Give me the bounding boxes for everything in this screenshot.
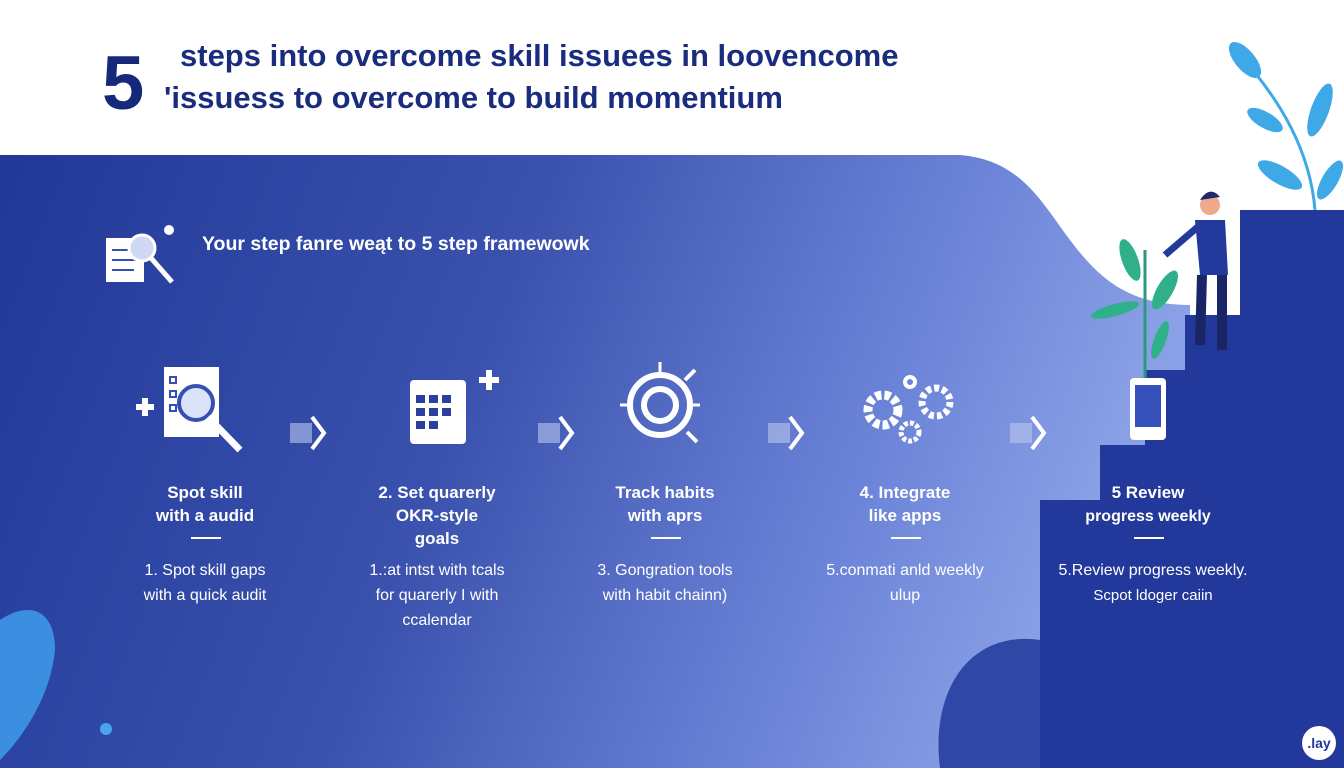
subtitle with icon [106, 225, 590, 284]
step 2: 2. Set quarerly [378, 483, 496, 502]
arrow 1 [290, 416, 326, 450]
step 2: OKR-style [396, 506, 478, 525]
icon: document magnifier [106, 225, 174, 284]
arrow 4 [1010, 416, 1046, 450]
plant with phone [1090, 239, 1178, 440]
step 3: Track habits [615, 483, 715, 502]
step 5: 5.Review progress weekly. [1058, 562, 1248, 579]
icon: target [620, 362, 700, 444]
step 2 [369, 370, 505, 629]
step 1 [136, 367, 266, 604]
title text [164, 38, 898, 115]
arrow 3 [768, 416, 804, 450]
step 4: ulup [890, 587, 920, 604]
step 4 [826, 375, 984, 604]
step 3: 3. Gongration tools [597, 562, 733, 579]
logo: .lay [1307, 735, 1331, 751]
title number: 5 [102, 41, 144, 126]
step 2: for quarerly I with [376, 587, 498, 604]
step 3: with habit chainn) [603, 587, 727, 604]
title text: 'issuess to overcome to build momentium [164, 80, 783, 115]
step 1: Spot skill [167, 483, 243, 502]
person [1162, 192, 1228, 350]
icon: checklist magnifier [136, 367, 242, 452]
step 4: 4. Integrate [860, 483, 950, 502]
step 3: with aprs [628, 506, 702, 525]
icon: gears [864, 375, 954, 444]
decorative plant top right [1228, 42, 1343, 210]
step 5: 5 Review [1112, 483, 1184, 502]
step 2: goals [415, 529, 459, 548]
step 2: ccalendar [402, 612, 472, 629]
title text: steps into overcome skill issuees in loovencome [180, 38, 898, 73]
step 1: 1. Spot skill gaps [145, 562, 265, 579]
step 1: with a audid [156, 506, 254, 525]
step 4: 5.conmati anld weekly [826, 562, 984, 579]
icon: calendar [410, 370, 499, 444]
subtitle with icon: Your step fanre weąt to 5 step framewowk [202, 233, 590, 255]
step 4: like apps [869, 506, 941, 525]
step 5 [1058, 483, 1248, 604]
arrow 2 [538, 416, 574, 450]
logo [1302, 726, 1336, 760]
step 2: 1.:at intst with tcals [369, 562, 505, 579]
step 5: Scpot ldoger caiin [1093, 587, 1213, 604]
step 1: with a quick audit [144, 587, 266, 604]
step 5: progress weekly [1085, 508, 1211, 525]
step 3 [597, 362, 733, 604]
